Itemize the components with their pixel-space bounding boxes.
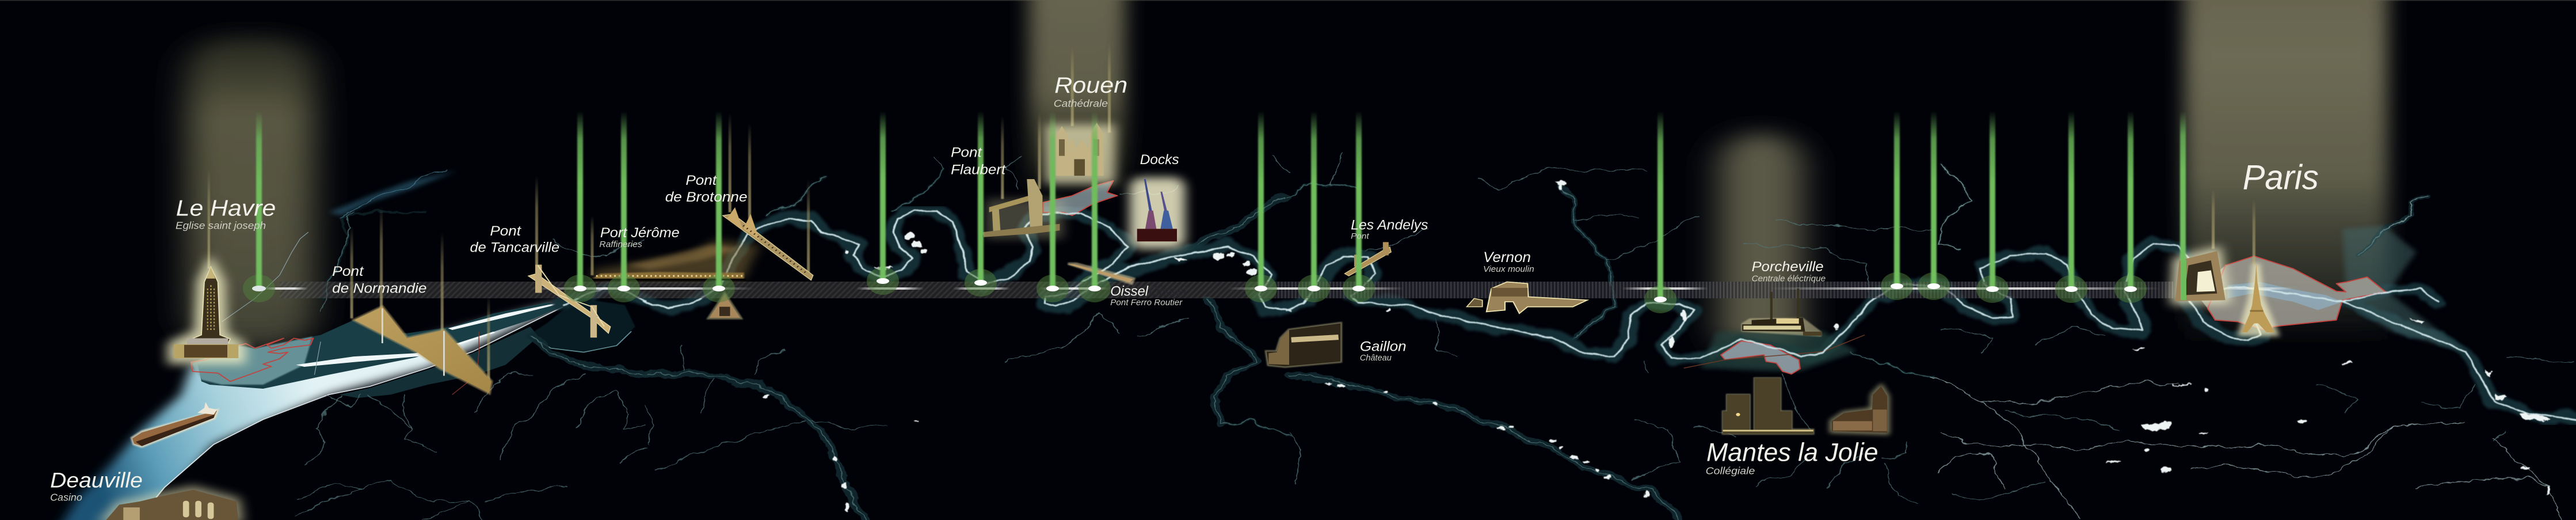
- icon: Docks cranes: [1130, 177, 1185, 249]
- glow: Rouen light column: [1029, 0, 1126, 196]
- label: Oissel: Oissel: [1149, 283, 1187, 299]
- river: Seine main channel: [563, 211, 2576, 420]
- label: Port Jérôme: [599, 225, 680, 249]
- label: Rouen: [1054, 73, 1127, 109]
- green beam: Elbeuf: [1245, 111, 1277, 302]
- icon: cargo ship: [132, 402, 218, 447]
- green beam: Le Havre: [243, 111, 275, 302]
- label: Le Havre: [176, 196, 276, 231]
- label: Pont de Brotonne: de Brotonne: [665, 189, 748, 204]
- red outline: Le Havre urban area: [191, 332, 479, 394]
- estuary: Seine mouth and water: [58, 171, 635, 520]
- label: Deauville: Deauville: [50, 468, 143, 492]
- label: Les Andelys: Les Andelys: [1351, 217, 1428, 233]
- icon: Deauville casino: [105, 489, 239, 520]
- label: Pont de Tancarville: Pont: [490, 223, 521, 238]
- icon: Mantes towers: [1723, 378, 1813, 434]
- icon: Pont Flaubert: [982, 179, 1064, 239]
- polygon: Mantes urban area: [1684, 332, 1865, 374]
- label: Vernon: [1483, 249, 1534, 274]
- green beam: Meulan: [1918, 111, 1950, 300]
- label: Rouen: Rouen: [1054, 73, 1127, 98]
- label: Pont Flaubert: Pont: [951, 144, 982, 160]
- label: Pont de Tancarville: de Tancarville: [470, 239, 559, 255]
- label: Pont de Normandie: de Normandie: [332, 280, 426, 296]
- label: Docks: Docks: [1140, 151, 1179, 167]
- icon: Les Andelys bridge: [1344, 242, 1391, 276]
- icon: small abbey: [708, 294, 741, 318]
- icon: Mantes collegiate church: [1832, 386, 1887, 433]
- green beam: Brotonne: [703, 111, 735, 302]
- green beam: Conflans: [1976, 111, 2009, 303]
- green beam: Les Andelys: [1343, 111, 1375, 302]
- label: Porcheville: [1752, 259, 1826, 283]
- label: Oissel: [1110, 283, 1187, 307]
- tributaries network: [296, 156, 2573, 520]
- glow: Mantes light column: [1718, 132, 1803, 358]
- glow: Paris light column: [2184, 0, 2388, 345]
- icon: Pont de Brotonne: [723, 207, 813, 280]
- label: Oissel: Oissel: [1110, 283, 1149, 299]
- icon: Eiffel Tower: [2242, 264, 2274, 333]
- icon: Le Havre Saint Joseph church: [173, 265, 241, 360]
- river: Seine floodplain: [563, 211, 2576, 420]
- icon: Pont de Tancarville: [528, 265, 611, 337]
- label: Gaillon: Château: [1360, 353, 1392, 363]
- icon: Porcheville power station: [1742, 289, 1822, 337]
- polygon: Rouen urban area: [1043, 181, 1117, 215]
- label: Vernon: Vieux moulin: [1483, 264, 1534, 274]
- green beam: Rouen east: [1079, 111, 1111, 302]
- label: Les Andelys: [1351, 217, 1428, 241]
- label: Le Havre: Eglise saint joseph: [176, 220, 266, 231]
- label: Pont de Normandie: [332, 263, 426, 296]
- green beam: Saint-Germain: [2114, 111, 2147, 303]
- label: Deauville: Casino: [50, 492, 82, 503]
- icon: Grande Arche de la Défense: [2175, 250, 2226, 301]
- green beam: Seine loop 2: [965, 111, 997, 297]
- label: Pont Flaubert: Flaubert: [951, 161, 1007, 177]
- label: Les Andelys: Pont: [1351, 232, 1369, 241]
- glow: Le Havre light column: [187, 36, 314, 348]
- label: Mantes la Jolie: Collégiale: [1706, 465, 1755, 477]
- label: Pont de Normandie: Pont: [332, 263, 364, 279]
- icon: Rouen cathedral: [1045, 123, 1115, 184]
- green beam: Port Jérôme east: [608, 111, 640, 302]
- green beam: Port Jérôme west: [564, 111, 596, 302]
- label: Port Jérôme: Raffineries: [599, 240, 642, 249]
- green beam: Poissy: [2055, 111, 2087, 303]
- timeline highlights: [263, 287, 2294, 290]
- label: Pont de Brotonne: Pont: [685, 172, 717, 188]
- icon: Vernon old mill: [1467, 282, 1587, 313]
- green beam: Rouen west: [1037, 111, 1069, 302]
- label: Rouen: Cathédrale: [1054, 98, 1108, 109]
- icon: Oissel Pont Ferro Routier: [1068, 264, 1134, 283]
- label: Deauville: [50, 468, 143, 503]
- label: Pont de Brotonne: [665, 172, 748, 204]
- thin amber light beams: [208, 43, 2255, 381]
- label: Gaillon: [1360, 338, 1407, 363]
- label: Mantes la Jolie: [1706, 438, 1878, 477]
- icon: Pont de Normandie: [355, 307, 491, 393]
- label: Port Jérôme: Port Jérôme: [600, 225, 680, 240]
- green beam: Gaillon: [1298, 111, 1330, 302]
- green beam: Vernon: [1644, 111, 1676, 313]
- label: Pont Flaubert: [951, 144, 1007, 177]
- river islands and lakes: [763, 181, 2550, 512]
- green beam: Mantes east: [1881, 111, 1913, 300]
- label: Vernon: Vernon: [1483, 249, 1531, 265]
- timeline band: hatched stripe along the route: [280, 282, 2173, 298]
- label: Paris: Paris: [2243, 158, 2319, 197]
- icon: Port Jérôme refinery: [592, 241, 760, 280]
- label: Oissel: Pont Ferro Routier: [1110, 298, 1183, 307]
- label: Porcheville: Centrale éléctrique: [1752, 274, 1826, 283]
- icon: Gaillon castle: [1267, 324, 1340, 366]
- label: Le Havre: Le Havre: [176, 196, 276, 221]
- label: Pont de Tancarville: [470, 223, 559, 255]
- label: Porcheville: Porcheville: [1752, 259, 1824, 274]
- label: Gaillon: Gaillon: [1360, 338, 1407, 354]
- green beam: Seine loop 1: [867, 111, 899, 295]
- polygon: Paris urban area: [2194, 226, 2466, 351]
- green beam: La Défense: [2180, 111, 2186, 261]
- label: Mantes la Jolie: Mantes la Jolie: [1706, 438, 1878, 466]
